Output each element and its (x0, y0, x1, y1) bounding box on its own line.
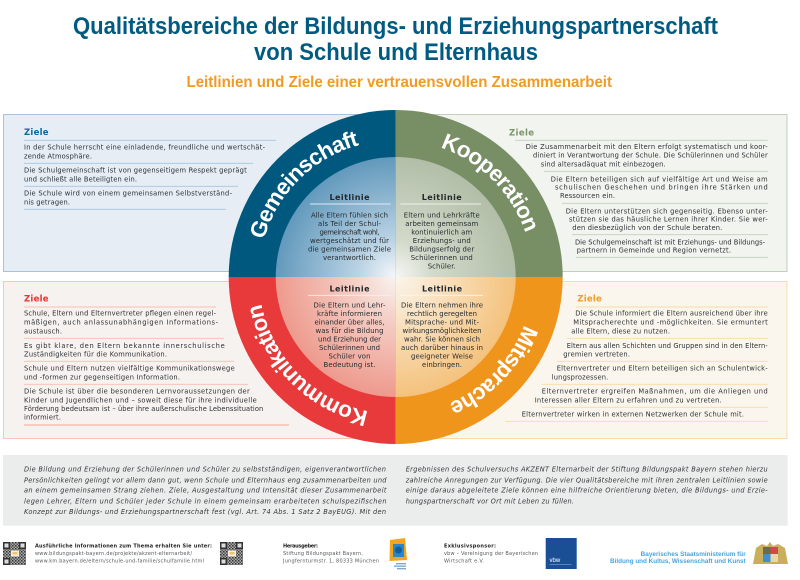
goal list: zende Atmosphäre. (24, 152, 92, 160)
footer: further information: Ausführliche Informationen zum Thema erhalten Sie unter: (35, 543, 212, 549)
goal list: Interessen aller Eltern zu erfahren und zu vertreten. (535, 396, 722, 404)
intro text: left column: an einem gemeinsamen Strang ziehen. Ziele, Ausgestaltung und Intensität dieser Zusammenarbeit (24, 487, 387, 495)
goal list: diniert in Verantwortung der Schule. Die Schülerinnen und Schüler (533, 152, 768, 160)
goal list: schulischen Geschehen und bringen ihre Stärken und (555, 184, 768, 192)
goal list: mäßigen, auch anlassunabhängigen Informations- (24, 319, 219, 327)
goal list: Elternvertreter und Eltern beteiligen sich an Schulentwick- (557, 365, 768, 373)
goal list: In der Schule herrscht eine einladende, freundliche und wertschät- (24, 144, 266, 152)
footer: ministry: Bayerisches Staatsministerium für (641, 551, 746, 558)
footer: ministry: Bildung und Kultus, Wissenschaft und Kunst (610, 558, 746, 565)
quadrant: Gemeinschaft: als Teil der Schul- (318, 220, 382, 228)
footer: sponsor: Wirtschaft e.V. (444, 559, 484, 565)
quadrant: Gemeinschaft: die gemeinsamen Ziele (308, 246, 391, 254)
footer: sponsor (444, 543, 538, 565)
goal list: Die Schule ist über die besonderen Lernvoraussetzungen der (24, 388, 250, 396)
intro text: right column: Ergebnissen des Schulversuchs AKZENT Elternarbeit der Stiftung Bildungspakt Bayern stehen hierzu (406, 466, 768, 474)
quadrant: Mitsprache: auch darüber hinaus in (401, 344, 483, 352)
goal list: Kinder und Jugendlichen und – soweit diese für ihre individuelle (24, 396, 257, 404)
goal list: Die Schule wird von einem gemeinsamen Selbstverständ- (24, 190, 233, 198)
logo: Stiftung Bildungspakt Bayern (390, 538, 407, 569)
intro text: right column: zahlreiche Anregungen zur Verfügung. Die vier Qualitätsbereiche mit ihren zentralen Leitlinien sowie (405, 476, 768, 484)
goal list: Die Schule informiert die Eltern ausreichend über ihre (575, 310, 768, 318)
heading: Ziele: Ziele (509, 128, 534, 138)
quadrant: Mitsprache: wahr. Sie können sich (404, 336, 480, 344)
heading: Ziele: Ziele (577, 295, 602, 305)
title: von Schule und Elternhaus (254, 39, 538, 66)
quadrant: Kooperation: Schüler. (428, 262, 456, 270)
footer: publisher: Herausgeber: (283, 543, 318, 549)
quadrant: Kooperation: Erziehungs- und (413, 237, 471, 245)
goal list: informiert. (24, 413, 61, 421)
footer: sponsor: vbw – Vereinigung der Bayerischen (444, 551, 538, 557)
goal list: Förderung bedeutsam ist – über ihre außerschulische Lebenssituation (24, 405, 263, 413)
goal list: Ressourcen ein. (560, 192, 615, 200)
goal list: Elternvertreter ergreifen Maßnahmen, um die Anliegen und (542, 388, 768, 396)
subtitle: Leitlinien und Ziele einer vertrauensvollen Zusammenarbeit (186, 74, 613, 91)
panel: Kommunikation Ziele (4, 282, 404, 438)
footer: publisher: Stiftung Bildungspakt Bayern, (283, 551, 363, 557)
footer: ministry (610, 551, 746, 565)
quadrant: Kooperation: Schülerinnen und (411, 254, 473, 262)
quadrant: Mitsprache: Mitsprache- und Mit- (405, 318, 480, 326)
goal list: Die Schulgemeinschaft ist mit Erziehungs- und Bildungs- (575, 238, 766, 246)
goal list: Zuständigkeiten für die Kommunikation. (24, 350, 167, 358)
goal list (24, 140, 276, 209)
quadrant: Mitsprache: Die Eltern nehmen ihre (401, 301, 483, 309)
quadrant: Mitsprache (396, 277, 563, 444)
goal list (515, 140, 768, 257)
quadrant: Kommunikation: und Erziehung der (318, 336, 381, 344)
panel: Gemeinschaft Ziele (4, 114, 404, 272)
intro text: left column: Die Bildung und Erziehung der Schülerinnen und Schüler zu selbstständigen, eigenverantwortlichen (24, 466, 386, 474)
QR code 2 (220, 542, 243, 565)
goal list: Die Eltern beteiligen sich auf vielfältige Art und Weise am (551, 175, 768, 183)
footer: further information: www.bildungspakt-bayern.de/projekte/akzent-elternarbeit/ (35, 551, 192, 557)
quadrant: Kooperation (396, 110, 563, 277)
goal list: Eltern aus allen Schichten und Gruppen sind in den Eltern- (567, 342, 768, 350)
footer: further information (35, 543, 212, 565)
quadrant: Kooperation: Leitlinie (422, 193, 462, 202)
quadrant: Gemeinschaft: Gemeinschaft (251, 132, 359, 237)
goal list: lungsprozessen. (552, 373, 608, 381)
quadrant: Kommunikation: Schüler von (328, 353, 370, 361)
intro text: right column: einige daraus abgeleitete Ziele können eine hilfreiche Orientierung bieten, die Bildungs- und Erzie- (406, 487, 768, 495)
quadrant: Gemeinschaft: Leitlinie (330, 193, 370, 202)
quadrant: Kooperation: Eltern und Lehrkräfte (404, 211, 480, 219)
title (73, 13, 718, 66)
intro text: left column (24, 466, 387, 516)
goal list: Mitspracherechte und -möglichkeiten. Sie ermuntert (573, 319, 768, 327)
quadrant: Kommunikation: Kommunikation (250, 304, 367, 426)
quadrant: Mitsprache: einbringen. (422, 361, 462, 369)
quadrant: Gemeinschaft: gemeinschaft wohl, (320, 229, 380, 237)
goal list: nis getragen. (24, 199, 70, 207)
goal list: sind altersadäquat mit einbezogen. (541, 160, 666, 168)
footer: sponsor: Exklusivsponsor: (444, 543, 496, 549)
footer: publisher (282, 543, 379, 565)
intro text: left column: Konzept zur Bildungs- und Erziehungspartnerschaft fest (vgl. Art. 74 Abs. 1 Satz 2 BayEUG). Mit den (24, 508, 386, 516)
quadrant: Gemeinschaft: wertgeschätzt und für (310, 237, 389, 245)
logo: vbw (546, 538, 577, 569)
quadrant: Kommunikation: einander über alles, (314, 318, 384, 326)
goal list: und schließt alle Beteiligten ein. (24, 176, 137, 184)
goal list: Es gibt klare, den Eltern bekannte innerschulische (24, 342, 225, 350)
heading: Ziele: Ziele (24, 295, 49, 305)
quadrant: Kooperation: Bildungserfolg der (409, 246, 474, 254)
quadrant: Kooperation: Kooperation (442, 134, 536, 232)
quadrant: Mitsprache: rechtlich geregelten (407, 310, 477, 318)
goal list: Die Eltern unterstützen sich gegenseitig. Ebenso unter- (566, 207, 768, 215)
goal list: stützen sie das häusliche Lernen ihrer Kinder. Sie wer- (569, 216, 768, 224)
panel: Kooperation Ziele (396, 114, 787, 272)
quadrant: Kooperation: arbeiten gemeinsam (405, 220, 478, 228)
quadrant: Mitsprache: Mitsprache (450, 326, 538, 412)
intro text: right column: hungspartnerschaft vor Ort mit Leben zu füllen. (406, 497, 574, 505)
goal list: alle Eltern, diese zu nutzen. (571, 327, 670, 335)
footer: further information: www.km.bayern.de/eltern/schule-und-familie/schulfamilie.html (35, 559, 204, 565)
goal list (24, 307, 289, 425)
quadrant: Gemeinschaft (228, 110, 396, 277)
quadrant: Kooperation: kontinuierlich am (411, 229, 472, 237)
title: Qualitätsbereiche der Bildungs- und Erziehungspartnerschaft (73, 13, 718, 40)
footer: publisher: Jungfernturmstr. 1, 80333 München (282, 559, 379, 565)
heading: Ziele: Ziele (24, 128, 49, 138)
goal list: austausch. (24, 327, 62, 335)
intro text: right column (405, 466, 768, 505)
goal list: Die Schulgemeinschaft ist von gegenseitigem Respekt geprägt (24, 167, 247, 175)
intro text: left column: Persönlichkeiten gelingt vor allem dann gut, wenn Schule und Elternhaus eng zusammenarbeiten und (24, 476, 387, 484)
QR code 1 (3, 542, 26, 565)
goal list: gremien vertreten. (563, 350, 630, 358)
intro text: left column: legen Lehrer, Eltern und Schüler jeder Schule in einem gemeinsam erarbeiteten schulspezifischen (24, 497, 387, 505)
goal list: Schule, Eltern und Elternvertreter pflegen einen regel- (24, 310, 217, 318)
quadrant: Gemeinschaft: verantwortlich. (323, 254, 376, 262)
goal list: den diesbezüglich von der Schule beraten. (572, 224, 722, 232)
quadrant: Mitsprache: Leitlinie (422, 284, 463, 293)
logo: vbw: vbw (550, 558, 561, 564)
quadrant: Kommunikation: was für die Bildung (316, 327, 384, 335)
goal list: partnern in Gemeinde und Region vernetzt. (577, 247, 731, 255)
goal list: Die Zusammenarbeit mit den Eltern erfolgt systematisch und koor- (526, 143, 768, 151)
quadrant: Kommunikation: Schülerinnen und (319, 344, 380, 352)
goal list (505, 307, 768, 421)
quadrant: Mitsprache: geeigneter Weise (411, 353, 473, 361)
quadrant: Mitsprache: wirkungsmöglichkeiten (402, 327, 482, 335)
goal list: Schule und Eltern nutzen vielfältige Kommunikationswege (24, 365, 235, 373)
quadrant: Kommunikation: Bedeutung ist. (324, 361, 376, 369)
quadrant: Kommunikation: kräfte informieren (317, 310, 382, 318)
quadrant: Kommunikation (228, 277, 396, 444)
quadrant: Gemeinschaft: Alle Eltern fühlen sich (311, 211, 388, 219)
intro text box (3, 455, 788, 526)
goal list: und -formen zur gegenseitigen Information. (24, 373, 180, 381)
circle diagram (228, 110, 563, 444)
goal list: Elternvertreter wirken in externen Netzwerken der Schule mit. (522, 411, 744, 419)
quadrant: Kommunikation: Die Eltern und Lehr- (314, 301, 386, 309)
panel: Mitsprache Ziele (396, 282, 787, 438)
icon: Bavarian coat of arms (753, 542, 788, 564)
quadrant: Kommunikation: Leitlinie (330, 284, 370, 293)
